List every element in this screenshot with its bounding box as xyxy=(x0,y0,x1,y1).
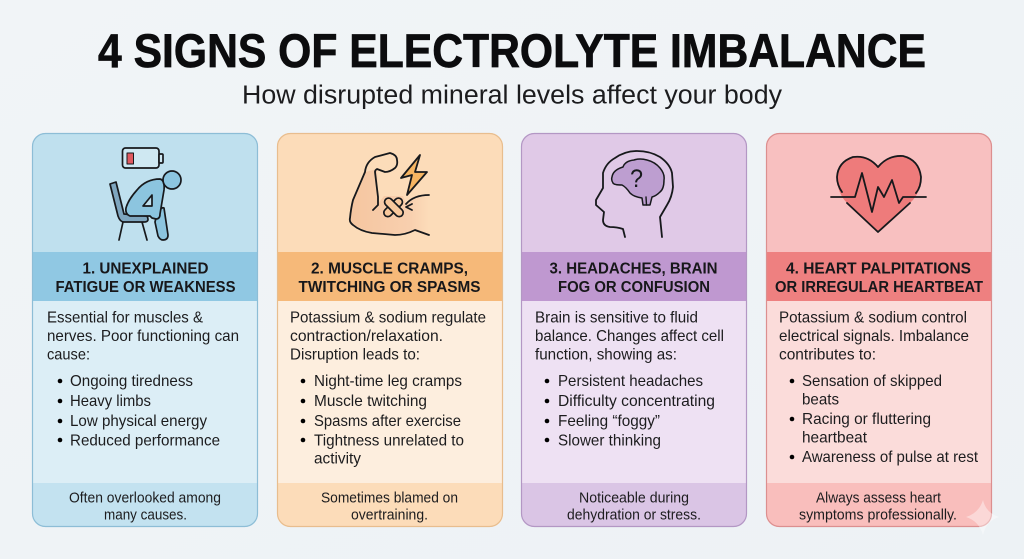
bullet list: heartbeat xyxy=(802,430,868,446)
bullet list: beats xyxy=(802,392,839,408)
bullet list xyxy=(58,373,220,450)
heading xyxy=(298,260,481,296)
bullet list: Persistent headaches xyxy=(558,373,703,390)
panel: headaches and brain fog xyxy=(521,133,747,527)
text block: description: Disruption leads to: xyxy=(290,346,420,364)
text block: description: Brain is sensitive to fluid xyxy=(535,310,698,326)
heading: OR IRREGULAR HEARTBEAT xyxy=(775,279,983,296)
footer note xyxy=(799,490,957,524)
heading xyxy=(550,260,718,296)
bullet list: Feeling “foggy” xyxy=(558,413,660,430)
bullet list xyxy=(545,373,715,450)
bullet list: Slower thinking xyxy=(558,432,661,450)
footer note xyxy=(69,490,221,524)
bullet list: Racing or fluttering xyxy=(802,411,931,428)
icon: tired person with low battery xyxy=(110,148,181,240)
heading xyxy=(775,260,983,296)
heading: FOG OR CONFUSION xyxy=(558,279,710,296)
bullet list: Muscle twitching xyxy=(314,393,427,410)
footer note: Noticeable during xyxy=(579,490,689,506)
bullet list: Ongoing tiredness xyxy=(70,373,193,390)
text block: description: function, showing as: xyxy=(535,346,677,364)
text block: description: electrical signals. Imbalance xyxy=(779,328,969,345)
icon label: question mark: ? xyxy=(630,165,643,193)
text block: description: contraction/relaxation. xyxy=(290,328,443,345)
heading: 1. UNEXPLAINED xyxy=(82,260,208,278)
subtitle: How disrupted mineral levels affect your body xyxy=(242,82,782,110)
panel: fatigue or weakness xyxy=(32,133,258,527)
panel: muscle cramps xyxy=(277,133,503,527)
panel: heart palpitations xyxy=(766,133,992,527)
footer note: Always assess heart xyxy=(816,490,942,506)
heading: 2. MUSCLE CRAMPS, xyxy=(311,260,468,278)
bullet list: Awareness of pulse at rest xyxy=(802,449,979,466)
bullet list: activity xyxy=(314,450,361,468)
text block: description xyxy=(535,310,724,364)
text block: description xyxy=(47,310,239,364)
text block: description: contributes to: xyxy=(779,346,876,364)
text block: description: cause: xyxy=(47,346,90,364)
footer note: Sometimes blamed on xyxy=(321,490,458,506)
text block: description: Essential for muscles & xyxy=(47,310,203,326)
footer note xyxy=(321,490,458,524)
heading: TWITCHING OR SPASMS xyxy=(298,279,481,296)
text block: description: balance. Changes affect cell xyxy=(535,328,724,345)
bullet list: Sensation of skipped xyxy=(802,373,942,390)
text block: description xyxy=(779,310,969,364)
footer note: Often overlooked among xyxy=(69,490,221,506)
footer note: dehydration or stress. xyxy=(567,506,701,524)
heading xyxy=(56,260,236,296)
text block: description: nerves. Poor functioning can xyxy=(47,328,239,345)
heading: 3. HEADACHES, BRAIN xyxy=(550,260,718,278)
bullet list: Heavy limbs xyxy=(70,393,151,410)
icon: heart with pulse line xyxy=(831,156,926,232)
bullet list: Night-time leg cramps xyxy=(314,373,462,390)
footer note: many causes. xyxy=(104,506,187,524)
text block: description xyxy=(290,310,486,364)
footer note: symptoms professionally. xyxy=(799,506,957,524)
text block: description: Potassium & sodium control xyxy=(779,310,967,326)
bullet list xyxy=(790,373,979,466)
bullet list xyxy=(301,373,464,468)
bullet list: Reduced performance xyxy=(70,432,220,450)
bullet list: Spasms after exercise xyxy=(314,413,461,430)
heading: FATIGUE OR WEAKNESS xyxy=(56,279,236,296)
footer note xyxy=(567,490,701,524)
text block: description: Potassium & sodium regulate xyxy=(290,310,486,326)
icon: head with brain and question mark xyxy=(596,151,673,237)
title: 4 SIGNS OF ELECTROLYTE IMBALANCE xyxy=(98,24,926,77)
bullet list: Low physical energy xyxy=(70,413,207,430)
bullet list: Tightness unrelated to xyxy=(314,432,464,450)
bullet list: Difficulty concentrating xyxy=(558,393,715,410)
icon: sparkle watermark xyxy=(966,500,999,535)
footer note: overtraining. xyxy=(351,506,428,524)
icon: flexed arm with lightning bolt xyxy=(350,153,429,235)
heading: 4. HEART PALPITATIONS xyxy=(786,260,971,278)
